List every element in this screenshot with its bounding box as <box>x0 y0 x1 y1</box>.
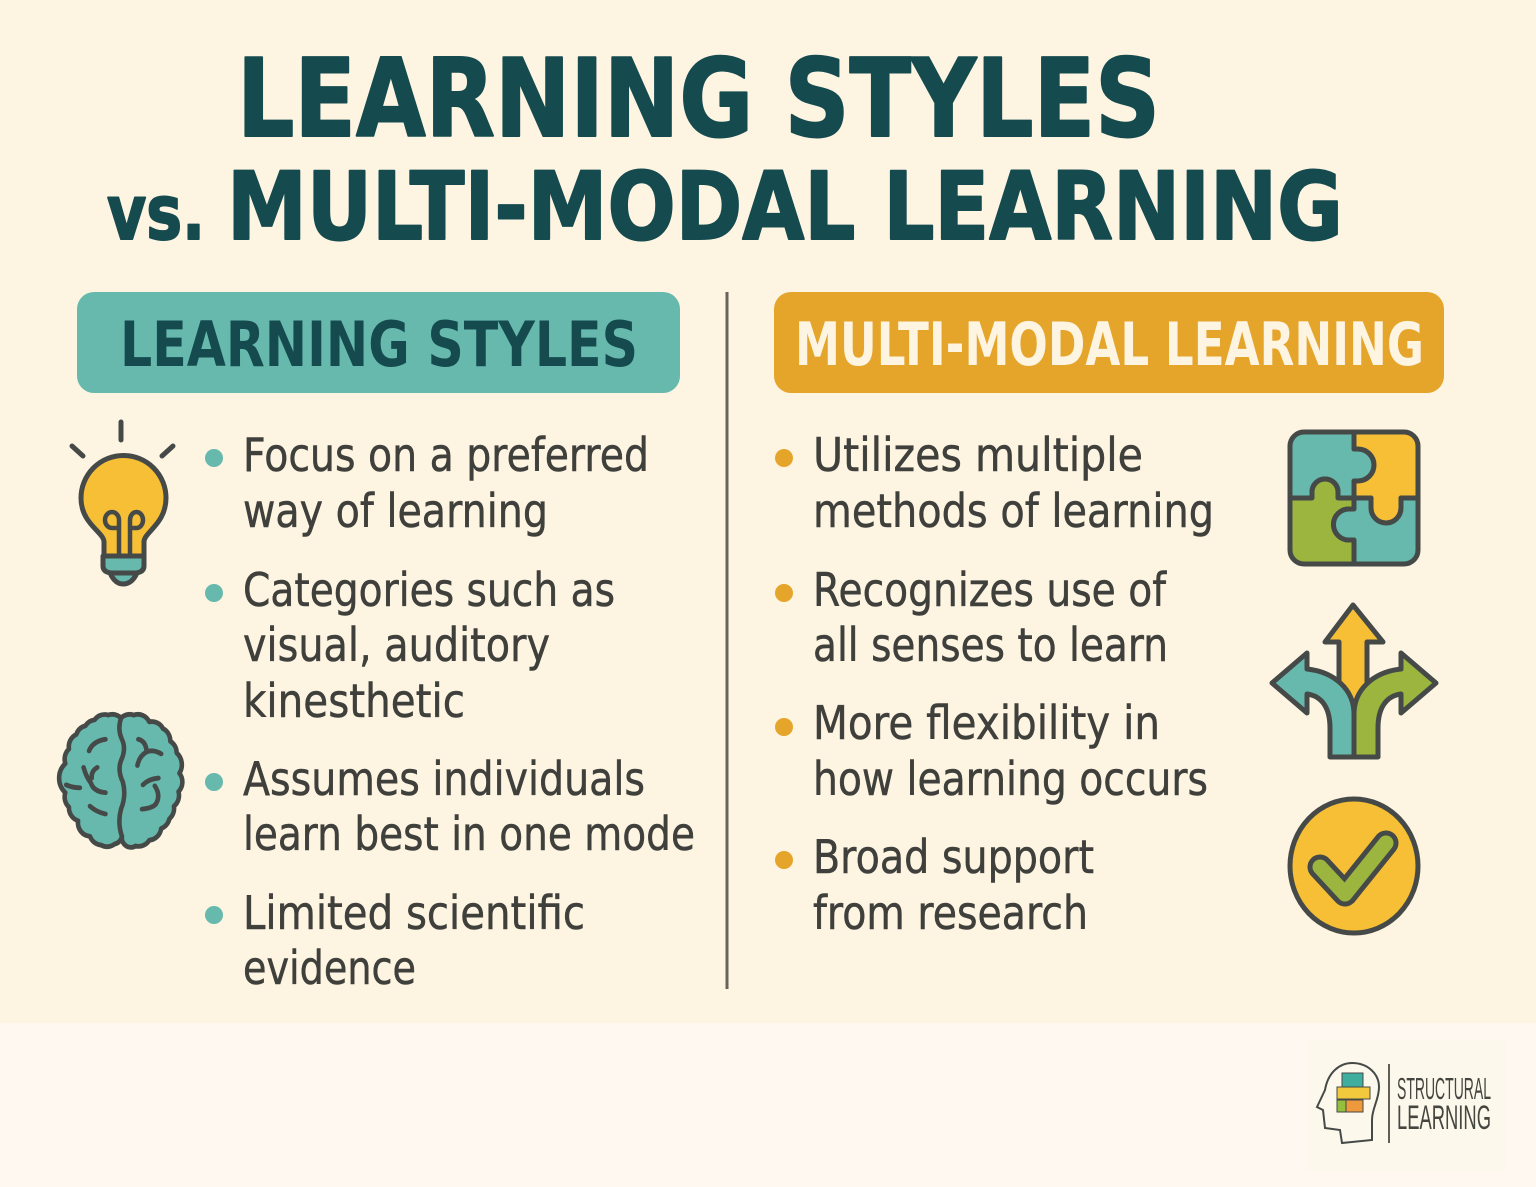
bullet: limited evidence <box>205 886 585 995</box>
bullet: multiple methods: methods of learning <box>813 484 1214 538</box>
panel: multi-modal learning <box>774 292 1444 940</box>
heading: learning styles <box>77 292 680 393</box>
bullet: multiple methods: Utilizes multiple <box>813 428 1143 482</box>
bullet: limited evidence: Limited scientific <box>243 886 585 940</box>
bullet: research support: from research <box>813 886 1088 940</box>
logo wordmark <box>1397 1071 1491 1137</box>
icon: branching arrows <box>1272 605 1436 757</box>
bullet: categories: Categories such as <box>243 563 615 617</box>
bullet: flexibility: how learning occurs <box>813 752 1208 806</box>
bullet: flexibility: More flexibility in <box>813 696 1160 750</box>
logo icon: head with blocks <box>1317 1063 1379 1143</box>
bullet list: learning styles <box>205 428 695 995</box>
bullet: flexibility <box>775 696 1208 806</box>
bullet: preferred way: Focus on a preferred <box>243 428 649 482</box>
title: vs. <box>107 168 205 257</box>
footer band <box>0 1023 1536 1187</box>
bullet: categories: kinesthetic <box>243 674 465 728</box>
bullet: all senses <box>775 563 1168 672</box>
bullet: categories <box>205 563 615 728</box>
title: LEARNING STYLES <box>237 37 1160 162</box>
bullet: all senses: all senses to learn <box>813 618 1168 672</box>
title <box>107 37 1343 262</box>
bullet: one mode <box>205 752 695 861</box>
icon: check mark <box>1290 799 1418 933</box>
bullet: research support: Broad support <box>813 830 1094 884</box>
bullet: multiple methods <box>775 428 1214 538</box>
bullet list: multi-modal learning <box>775 428 1214 940</box>
bullet: limited evidence: evidence <box>243 941 416 995</box>
icon: brain <box>59 714 182 847</box>
bullet: research support <box>775 830 1094 940</box>
bullet: preferred way: way of learning <box>243 484 548 538</box>
panel: learning styles <box>59 292 695 995</box>
heading: learning styles: LEARNING STYLES <box>120 308 638 381</box>
bullet: categories: visual, auditory <box>243 618 550 672</box>
bullet: one mode: Assumes individuals <box>243 752 645 806</box>
center divider <box>726 292 728 989</box>
logo: structural learning <box>1307 1040 1506 1172</box>
icon: puzzle <box>1290 432 1418 564</box>
bullet: one mode: learn best in one mode <box>243 807 695 861</box>
bullet: all senses: Recognizes use of <box>813 563 1168 617</box>
icon: light bulb <box>72 422 173 584</box>
heading: multi-modal learning <box>774 292 1444 393</box>
bullet: preferred way <box>205 428 649 538</box>
title: MULTI-MODAL LEARNING <box>227 153 1343 262</box>
